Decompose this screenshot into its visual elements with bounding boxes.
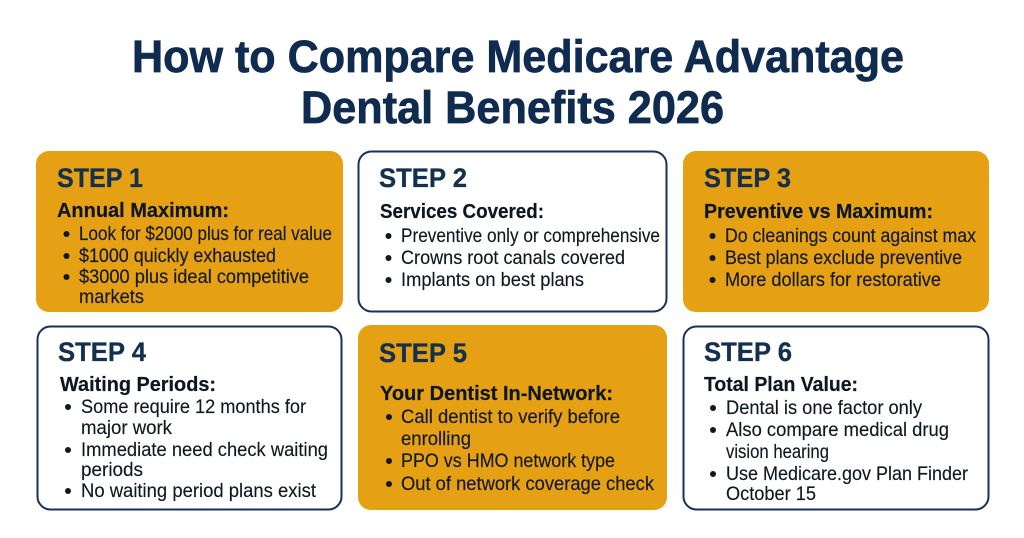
panel: step 5 your dentist in-network [358,325,667,510]
panel: step 4 waiting periods [38,326,342,510]
panel: step 3 preventive vs maximum: Preventive vs Maximum: [704,200,933,223]
panel: step 4 waiting periods: Immediate need check waiting [81,439,328,461]
panel: step 5 your dentist in-network: Out of network coverage check [401,473,654,495]
title: Dental Benefits 2026 [301,82,724,133]
panel: step 2 services covered: STEP 2 [379,163,467,193]
panel: step 6 total plan value: October 15 [726,483,816,505]
panel: step 3 preventive vs maximum [683,151,989,312]
panel: step 3 preventive vs maximum: Best plans exclude preventive [725,247,962,269]
panel: step 3 preventive vs maximum: More dollars for restorative [725,269,941,291]
panel: step 4 waiting periods: Waiting Periods: [60,373,216,396]
panel: step 5 your dentist in-network: Your Dentist In-Network: [380,382,613,405]
panel: step 4 waiting periods: No waiting period plans exist [81,480,317,502]
panel: step 6 total plan value: Use Medicare.gov Plan Finder [726,463,968,485]
panel: step 2 services covered: Crowns root canals covered [401,247,625,269]
panel: step 1 annual maximum: markets [79,286,144,308]
panel: step 1 annual maximum: $1000 quickly exhausted [79,245,276,267]
panel: step 1 annual maximum: $3000 plus ideal competitive [79,266,309,288]
panel: step 2 services covered: Preventive only or comprehensive [401,225,660,247]
title [132,31,904,133]
panel: step 5 your dentist in-network: STEP 5 [379,338,467,368]
panel: step 6 total plan value [684,326,988,510]
panel: step 6 total plan value: Also compare medical drug [726,419,949,441]
panel: step 5 your dentist in-network: Call dentist to verify before [401,406,620,428]
panel: step 5 your dentist in-network: PPO vs HMO network type [401,450,615,472]
panel: step 6 total plan value: STEP 6 [704,337,792,367]
panel: step 6 total plan value: Total Plan Value: [704,373,858,396]
panel: step 3 preventive vs maximum: STEP 3 [704,163,791,193]
panel: step 6 total plan value: Dental is one factor only [726,397,922,419]
panel: step 2 services covered: Services Covered: [380,200,544,223]
panel: step 5 your dentist in-network: enrolling [401,428,471,450]
panel: step 4 waiting periods: major work [81,417,172,439]
panel: step 3 preventive vs maximum: Do cleanings count against max [725,225,976,247]
panel: step 6 total plan value: vision hearing [726,441,829,463]
panel: step 4 waiting periods: Some require 12 months for [81,396,306,418]
title: How to Compare Medicare Advantage [132,31,904,82]
panel: step 1 annual maximum [36,151,343,312]
panel: step 2 services covered [358,152,666,312]
panel: step 1 annual maximum: Annual Maximum: [57,199,229,222]
panel: step 4 waiting periods: periods [81,459,143,481]
panel: step 2 services covered: Implants on best plans [401,269,584,291]
panel: step 1 annual maximum: STEP 1 [57,163,143,193]
panel: step 1 annual maximum: Look for $2000 plus for real value [79,223,332,245]
panel: step 4 waiting periods: STEP 4 [58,337,146,367]
